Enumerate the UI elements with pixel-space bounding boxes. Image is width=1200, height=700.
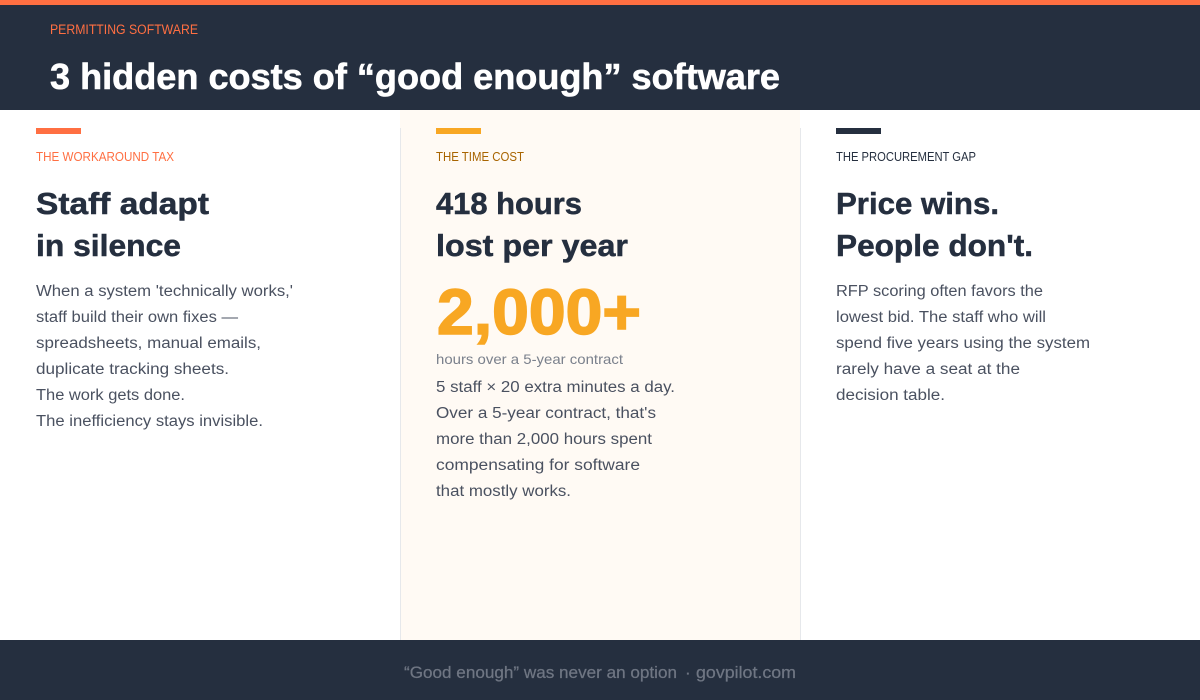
header band <box>0 0 1200 110</box>
body text <box>436 379 675 500</box>
body text: Over a 5-year contract, that's <box>436 405 656 422</box>
accent bar: orange <box>36 128 81 134</box>
footer text <box>404 663 796 682</box>
body text: spend five years using the system <box>836 335 1090 352</box>
eyebrow: PERMITTING SOFTWARE <box>50 22 198 37</box>
body text: staff build their own fixes — <box>36 309 239 326</box>
heading: price wins people don't <box>836 186 1033 263</box>
heading: staff adapt in silence: in silence <box>36 228 181 263</box>
footer text: “Good enough” was never an option <box>404 663 677 682</box>
body text: The inefficiency stays invisible. <box>36 413 263 430</box>
footer text: govpilot.com <box>696 663 796 682</box>
big stat: 2,000+: 2,000+ <box>437 276 641 348</box>
heading: 418 hours lost per year: lost per year <box>436 228 628 263</box>
heading: 418 hours lost per year: 418 hours <box>436 186 582 221</box>
heading: price wins people don't: Price wins. <box>836 186 999 221</box>
body text <box>836 283 1090 404</box>
body text: spreadsheets, manual emails, <box>36 335 261 352</box>
heading: 418 hours lost per year <box>436 186 628 263</box>
panel: the procurement gap <box>836 128 1090 404</box>
body text: RFP scoring often favors the <box>836 283 1043 300</box>
footer band <box>0 640 1200 700</box>
title: 3 hidden costs of “good enough” software <box>50 56 780 97</box>
body text: rarely have a seat at the <box>836 361 1020 378</box>
label: the time cost: THE TIME COST <box>436 150 524 164</box>
body text: compensating for software <box>436 457 640 474</box>
accent bar: navy <box>836 128 881 134</box>
footer text: · <box>685 663 691 682</box>
body text: that mostly works. <box>436 483 571 500</box>
heading: staff adapt in silence: Staff adapt <box>36 186 209 221</box>
heading: price wins people don't: People don't. <box>836 228 1033 263</box>
body text <box>36 283 293 430</box>
accent bar: amber <box>436 128 481 134</box>
body text: duplicate tracking sheets. <box>36 361 229 378</box>
body text: When a system 'technically works,' <box>36 283 293 300</box>
label: the procurement gap: THE PROCUREMENT GAP <box>836 150 976 164</box>
body text: more than 2,000 hours spent <box>436 431 653 448</box>
body text: 5 staff × 20 extra minutes a day. <box>436 379 675 396</box>
stat caption: hours over a 5-year contract <box>436 351 623 367</box>
panel: the time cost <box>400 110 801 640</box>
panel: the workaround tax <box>36 128 293 430</box>
label: the workaround tax: THE WORKAROUND TAX <box>36 150 175 164</box>
body text: The work gets done. <box>36 387 185 404</box>
heading: staff adapt in silence <box>36 186 209 263</box>
body text: lowest bid. The staff who will <box>836 309 1046 326</box>
body text: decision table. <box>836 387 945 404</box>
